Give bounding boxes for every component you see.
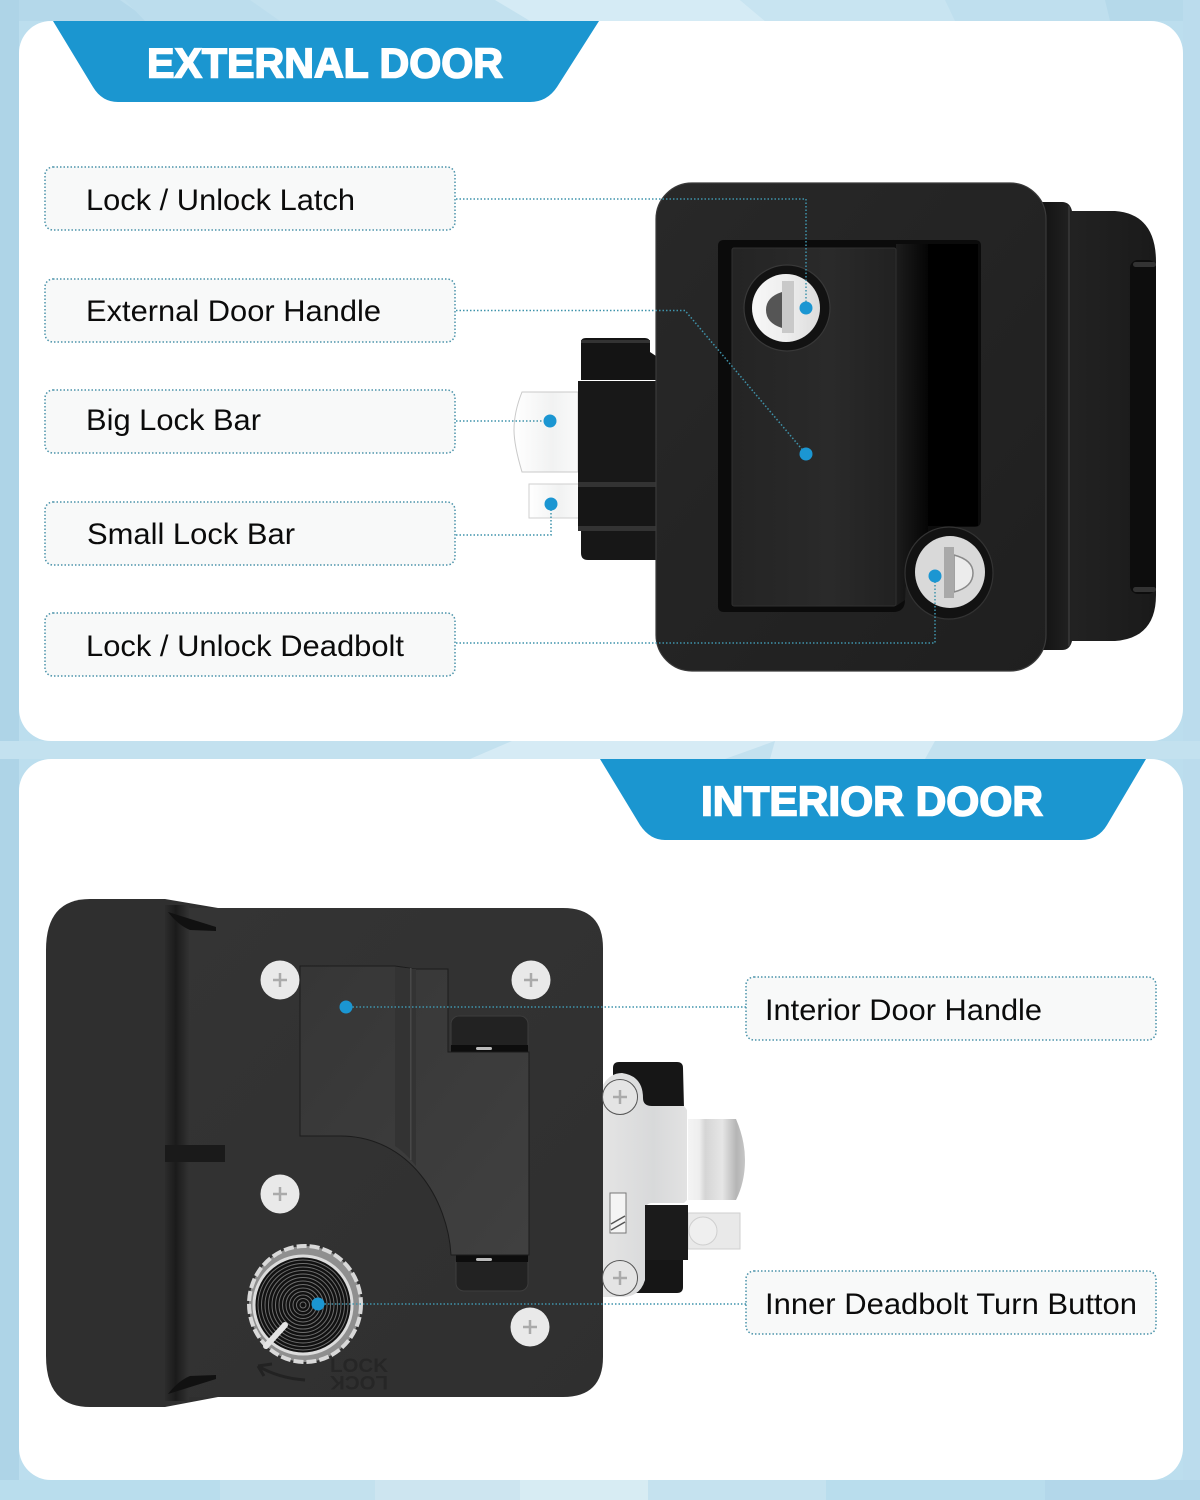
- embossed lock marking: LOCK: [330, 1356, 388, 1377]
- heading banner: interior door: INTERIOR DOOR: [701, 778, 1043, 824]
- illustration: external door lock: [514, 183, 1156, 671]
- callout: inner deadbolt turn button: Inner Deadbolt Turn Button: [765, 1288, 1137, 1321]
- icon: lock direction arrow: [258, 1364, 305, 1380]
- small lock bar: [529, 484, 579, 518]
- callout: external door handle: External Door Handle: [86, 295, 381, 328]
- icon: latch key cylinder: [744, 265, 830, 351]
- grip slot: [165, 905, 225, 1401]
- callout: lock / unlock latch: Lock / Unlock Latch: [86, 184, 355, 217]
- panel: external door: [19, 21, 1183, 741]
- callout: lock / unlock deadbolt: [45, 570, 942, 676]
- latch chassis: [603, 1062, 745, 1297]
- icon: deadbolt turn knob: [249, 1246, 361, 1362]
- panel: interior door: [19, 759, 1183, 1480]
- heading banner: interior door: [600, 759, 1146, 840]
- latch housing: [578, 338, 656, 560]
- icon: deadbolt key cylinder: [905, 527, 993, 619]
- callout: external door handle: [45, 279, 812, 460]
- grip body: [46, 899, 218, 1407]
- callout: interior door handle: [340, 977, 1156, 1040]
- icon: screws: [260, 960, 638, 1346]
- callout: small lock bar: Small Lock Bar: [87, 518, 295, 551]
- external door handle: [732, 248, 896, 606]
- upper hinge: [451, 1016, 528, 1052]
- callout: lock / unlock latch: [45, 167, 812, 314]
- callout: big lock bar: [45, 390, 556, 453]
- heading banner: external door: EXTERNAL DOOR: [147, 40, 503, 86]
- callout: lock / unlock deadbolt: Lock / Unlock Deadbolt: [86, 630, 405, 663]
- callout: big lock bar: Big Lock Bar: [86, 404, 261, 437]
- callout: inner deadbolt turn button: [312, 1271, 1156, 1334]
- heading banner: external door: [53, 21, 599, 102]
- big lock bar: [514, 392, 578, 472]
- callout: small lock bar: [45, 498, 558, 565]
- back plate: [165, 908, 603, 1397]
- embossed lock marking: LOCK: [330, 1371, 388, 1392]
- face plate: [656, 183, 1046, 671]
- embossed lock marking: [330, 1356, 388, 1392]
- interior door handle: [300, 966, 529, 1261]
- illustration: interior door lock: [46, 899, 745, 1407]
- callout: interior door handle: Interior Door Handle: [765, 994, 1042, 1027]
- side grip: [1036, 202, 1156, 650]
- lower hinge: [456, 1255, 528, 1291]
- handle recess: [718, 240, 981, 612]
